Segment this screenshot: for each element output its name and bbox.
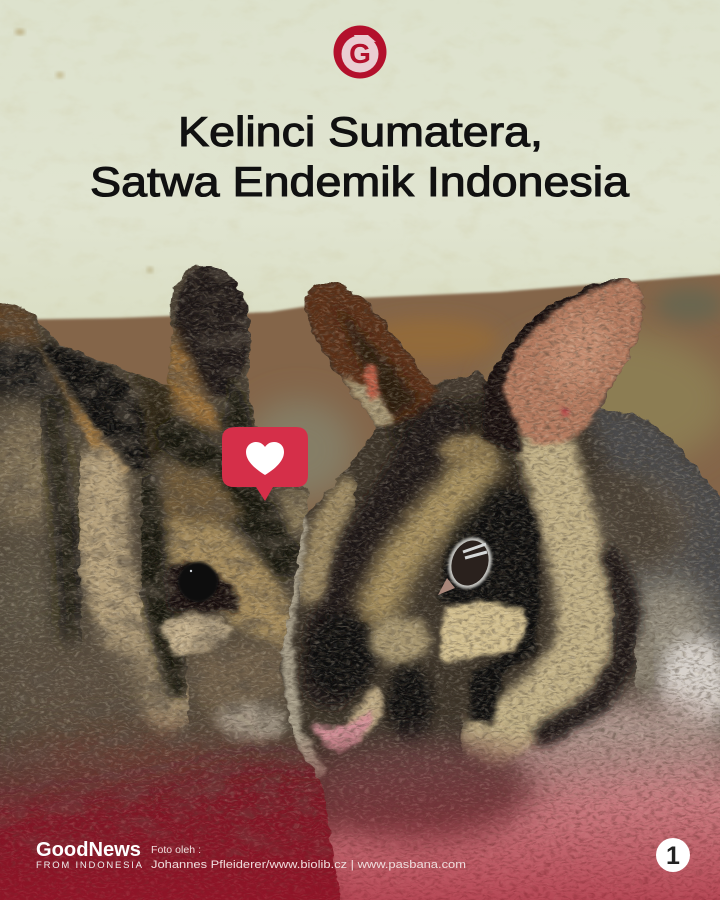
footer brand: GoodNews from Indonesia: GoodNews (36, 838, 141, 861)
left rabbit eye (178, 562, 218, 602)
logo badge: G (349, 38, 371, 69)
photo credit: Foto oleh : (151, 844, 201, 856)
page number badge: 1 (666, 842, 680, 870)
icon: heart (246, 442, 284, 475)
photo credit: Johannes Pfleiderer/www.biolib.cz | www.pasbana.com (151, 859, 466, 871)
photo credit (151, 844, 466, 871)
right rabbit eye (438, 531, 499, 595)
title: Kelinci Sumatera, (178, 108, 543, 155)
logo badge (334, 26, 386, 78)
right rabbit right ear (482, 278, 644, 452)
right rabbit (270, 270, 720, 900)
left rabbit front ear (38, 342, 155, 482)
left rabbit (0, 264, 340, 900)
title: Satwa Endemik Indonesia (90, 158, 630, 205)
footer brand: GoodNews from Indonesia: FROM INDONESIA (36, 860, 143, 871)
title (90, 108, 630, 205)
right rabbit body (300, 400, 720, 900)
left rabbit back ear (160, 262, 255, 430)
photo background: wall and ledge (0, 0, 720, 530)
right rabbit left ear (305, 283, 490, 425)
heart like bubble (222, 427, 308, 501)
page number badge (656, 838, 690, 872)
left rabbit body and face markings (0, 303, 340, 900)
right rabbit face markings (286, 395, 680, 840)
footer brand: GoodNews from Indonesia (36, 838, 143, 871)
red gradient overlay (0, 730, 720, 900)
